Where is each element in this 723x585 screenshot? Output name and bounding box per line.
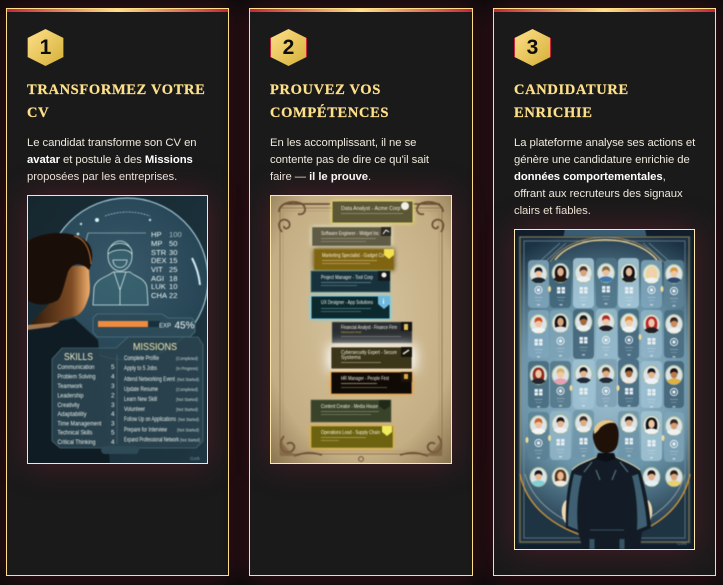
panel: step 1 transform CV [6,8,229,576]
illustration: recruiter facing wall of candidate profiles [514,229,695,550]
description step 3: La plateforme analyse ses actions et [514,137,695,149]
step number badge 3 [514,29,551,66]
skills and missions board: Apply to 5 Jobs [124,366,157,372]
skills and missions board: (Not Started) [176,397,198,403]
skills and missions board: 4 [111,411,115,418]
illustration: avatar with RPG stats, skills and missions [27,195,208,464]
panel: step 2 prove skills [249,8,473,576]
character stats: AGI [151,274,164,283]
character stats: MP [151,239,162,248]
description step 2 [270,137,429,183]
heading step 2 [270,82,389,120]
skills and missions board: Technical Skills [58,430,92,436]
description step 3: clairs et fiables. [514,205,591,217]
character stats: 15 [169,256,177,265]
skills and missions board: Teamwork [58,383,83,390]
skills and missions board: Attend Networking Event [124,377,175,383]
mission card: Financial Analyst [332,322,412,343]
mission card: UX Designer [311,296,390,319]
art deco frame and light [518,229,691,544]
heading step 1 [27,82,205,120]
skills and missions board: Volunteer [124,407,145,413]
description step 1: Le candidat transforme son CV en [27,137,197,149]
character stats: STR [151,248,167,257]
mission card: Data Analyst: Data Analyst - Acme Corp [341,206,401,212]
small gold connector lights [526,286,664,443]
character stats: LUK [151,282,166,291]
mission card: Marketing Specialist: Marketing Specialist - Gadget Co [322,253,384,259]
hud circle [46,198,208,360]
candidate portraits row 5 [530,468,682,486]
mission card: Software Engineer [312,227,391,246]
avatar line drawing [93,241,148,305]
mission card: Financial Analyst: Financial Analyst - Finance Firm [341,325,397,331]
exp bar: EXP [159,324,171,330]
skills and missions board: (Not Started) [176,407,198,413]
skills and missions board: Leadership [58,392,84,400]
skills and missions board: Learn New Skill [124,397,157,403]
character stats: 50 [169,239,177,248]
mission card: Cybersecurity Expert: Cybersecurity Expert - Secure [341,350,397,356]
mission card: Cybersecurity Expert [328,345,416,371]
character stats: 25 [169,265,177,274]
skills and missions board: Gork [190,456,201,461]
heading step 3: CANDIDATURE [514,82,629,98]
skills and missions board: Critical Thinking [58,439,96,446]
candidate card columns [526,258,684,486]
character stats: DEX [151,256,167,265]
heading step 2: PROUVEZ VOS [270,82,381,98]
mission card: Project Manager: Project Manager - Tool Corp [321,275,373,281]
mission card: Marketing Specialist [314,249,394,270]
skills and missions board: (Not Started) [178,417,199,423]
skills and missions board [52,337,203,461]
candidate portraits row 3 [530,364,682,408]
top gradient bar [494,9,715,12]
skills and missions board: 2 [111,392,115,400]
skills and missions board: 3 [111,383,115,390]
exp bar [93,314,195,337]
description step 2: contente pas de dire ce qu'il sait [270,154,429,166]
skills and missions board: Communication [58,364,95,371]
top gradient bar [7,9,228,12]
candidate seen from behind [27,233,110,464]
mission card: Project Manager [311,271,390,292]
description step 1: avatar et postule à des Missions [27,154,193,166]
mission card: Software Engineer: Software Engineer - Widget Inc [321,231,379,237]
step number badge 2 [270,29,307,66]
mission card: UX Designer: i [382,299,384,306]
mission card: Operations Lead [311,426,393,448]
step number badge 2: 2 [283,36,294,59]
skills and missions board: Creativity [58,402,80,409]
mission card: Cybersecurity Expert: Systems [341,355,361,361]
description step 3: données comportementales, [514,171,666,183]
character stats: HP [151,230,162,239]
description step 1: proposées par les entreprises. [27,171,177,183]
step number badge 3: 3 [527,36,538,59]
skills and missions board: Expand Professional Network [124,438,180,444]
skills and missions board: (Completed) [176,387,198,393]
skills and missions board: 4 [111,374,115,380]
candidate portraits row 2 [530,312,682,358]
heading step 1: TRANSFORMEZ VOTRE [27,82,205,98]
heading step 1: CV [27,104,49,120]
mission card: Data Analyst [332,201,413,223]
skills and missions board: 3 [111,402,115,409]
skills and missions board: (In Progress) [176,366,198,372]
recruiter seen from behind [562,420,652,549]
character stats: CHA [151,291,168,300]
skills and missions board: (Not Started) [180,438,200,444]
skills and missions board: (Not Started) [177,428,199,434]
character stats [151,230,182,300]
skills and missions board: Complete Profile [124,356,160,362]
mission card: Content Creator [311,400,391,422]
skills and missions board: Time Management [58,420,102,428]
watermark: Gork [677,541,688,546]
heading step 3 [514,82,629,120]
description step 2: En les accomplissant, il ne se [270,137,416,149]
mission card: Content Creator: Content Creator - Media House [321,404,378,410]
mission card: HR Manager [331,372,412,394]
skills and missions board: Adaptability [58,411,87,418]
skills and missions board: Prepare for Interview [124,428,168,434]
character stats: 18 [169,274,177,283]
character stats: 10 [169,282,177,291]
step number badge 1 [27,29,64,66]
skills and missions board: (Completed) [176,356,198,362]
mission card: Operations Lead: Operations Lead - Supply Chain [321,430,380,436]
description step 2: faire — il le prouve. [270,171,371,183]
skills and missions board: 4 [111,439,115,446]
skills and missions board: 5 [111,364,115,371]
character stats: 30 [169,248,177,257]
skills and missions board: 5 [111,430,115,436]
skills and missions board: Update Resume [124,387,159,393]
skills and missions board: Problem Solving [58,374,96,380]
character stats: VIT [151,265,163,274]
step number badge 1: 1 [40,36,51,59]
description step 3: offrant aux recruteurs des signaux [514,188,683,200]
top gradient bar [250,9,472,12]
mission card: Financial Analyst: Advanced level [341,330,362,334]
character stats: 100 [169,230,182,239]
skills and missions board: SKILLS [64,352,93,363]
description step 1 [27,137,197,183]
mission card: HR Manager: HR Manager - People First [341,376,389,382]
skills and missions board: MISSIONS [133,342,177,353]
character stats: 22 [169,291,177,300]
illustration: mission cards on parchment [270,195,452,464]
candidate portraits row 1 [530,264,682,307]
heading step 2: COMPÉTENCES [270,104,389,120]
description step 3 [514,137,696,217]
candidate portraits row 4 [530,414,682,460]
panel: step 3 enriched application [493,8,716,576]
skills and missions board: (Not Started) [177,377,199,383]
exp bar: 45% [174,320,195,332]
parchment frame and ornaments [279,202,443,461]
skills and missions board: Follow Up on Applications [124,417,176,423]
lower gold arcs [520,474,690,538]
skills and missions board: 3 [111,420,115,428]
description step 3: génère une candidature enrichie de [514,154,690,166]
mission card: UX Designer: UX Designer - App Solutions [321,300,373,306]
heading step 3: ENRICHIE [514,104,593,120]
